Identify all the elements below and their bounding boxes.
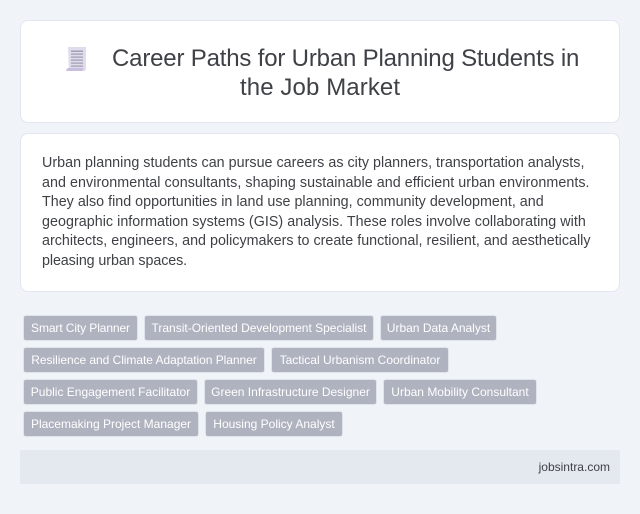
panel: title card xyxy=(20,20,620,123)
tag: Housing Policy Analyst xyxy=(213,417,335,431)
footer credit: jobsintra.com xyxy=(539,460,610,474)
tag xyxy=(205,411,343,437)
tag list xyxy=(23,315,537,437)
tag xyxy=(23,411,199,437)
text block: description: Urban planning students can pursue careers as city planners, transportation analysts, xyxy=(42,155,584,171)
tag xyxy=(380,315,497,341)
title xyxy=(112,45,579,101)
text block: description: pleasing urban spaces. xyxy=(42,252,187,268)
text block: description: geographic information systems (GIS) analysis. These roles involve collaborating with xyxy=(42,214,586,230)
tag: Placemaking Project Manager xyxy=(31,417,191,431)
footer bar xyxy=(20,450,620,484)
icon: paper scroll xyxy=(66,47,86,71)
tag xyxy=(271,347,449,373)
tag: Public Engagement Facilitator xyxy=(31,385,190,399)
text block: description: and environmental consultants, shaping sustainable and efficient urban environments. xyxy=(42,174,590,190)
tag: Resilience and Climate Adaptation Planner xyxy=(31,353,257,367)
text block: description xyxy=(42,155,591,268)
title: the Job Market xyxy=(240,74,400,101)
tag: Green Infrastructure Designer xyxy=(211,385,370,399)
panel: description xyxy=(20,133,620,292)
tag xyxy=(23,347,265,373)
tag xyxy=(23,315,138,341)
text block: description: They also find opportunities in land use planning, community development, and xyxy=(42,194,544,210)
tag xyxy=(23,379,198,405)
tag: Urban Data Analyst xyxy=(387,321,490,335)
tag: Transit-Oriented Development Specialist xyxy=(152,321,366,335)
text block: description: architects, engineers, and policymakers to create functional, resilient, and aesthetically xyxy=(42,233,591,249)
title: Career Paths for Urban Planning Students in xyxy=(112,45,579,72)
tag xyxy=(144,315,374,341)
tag: Urban Mobility Consultant xyxy=(391,385,529,399)
tag: Smart City Planner xyxy=(31,321,130,335)
tag xyxy=(204,379,377,405)
tag xyxy=(383,379,537,405)
tag: Tactical Urbanism Coordinator xyxy=(280,353,440,367)
